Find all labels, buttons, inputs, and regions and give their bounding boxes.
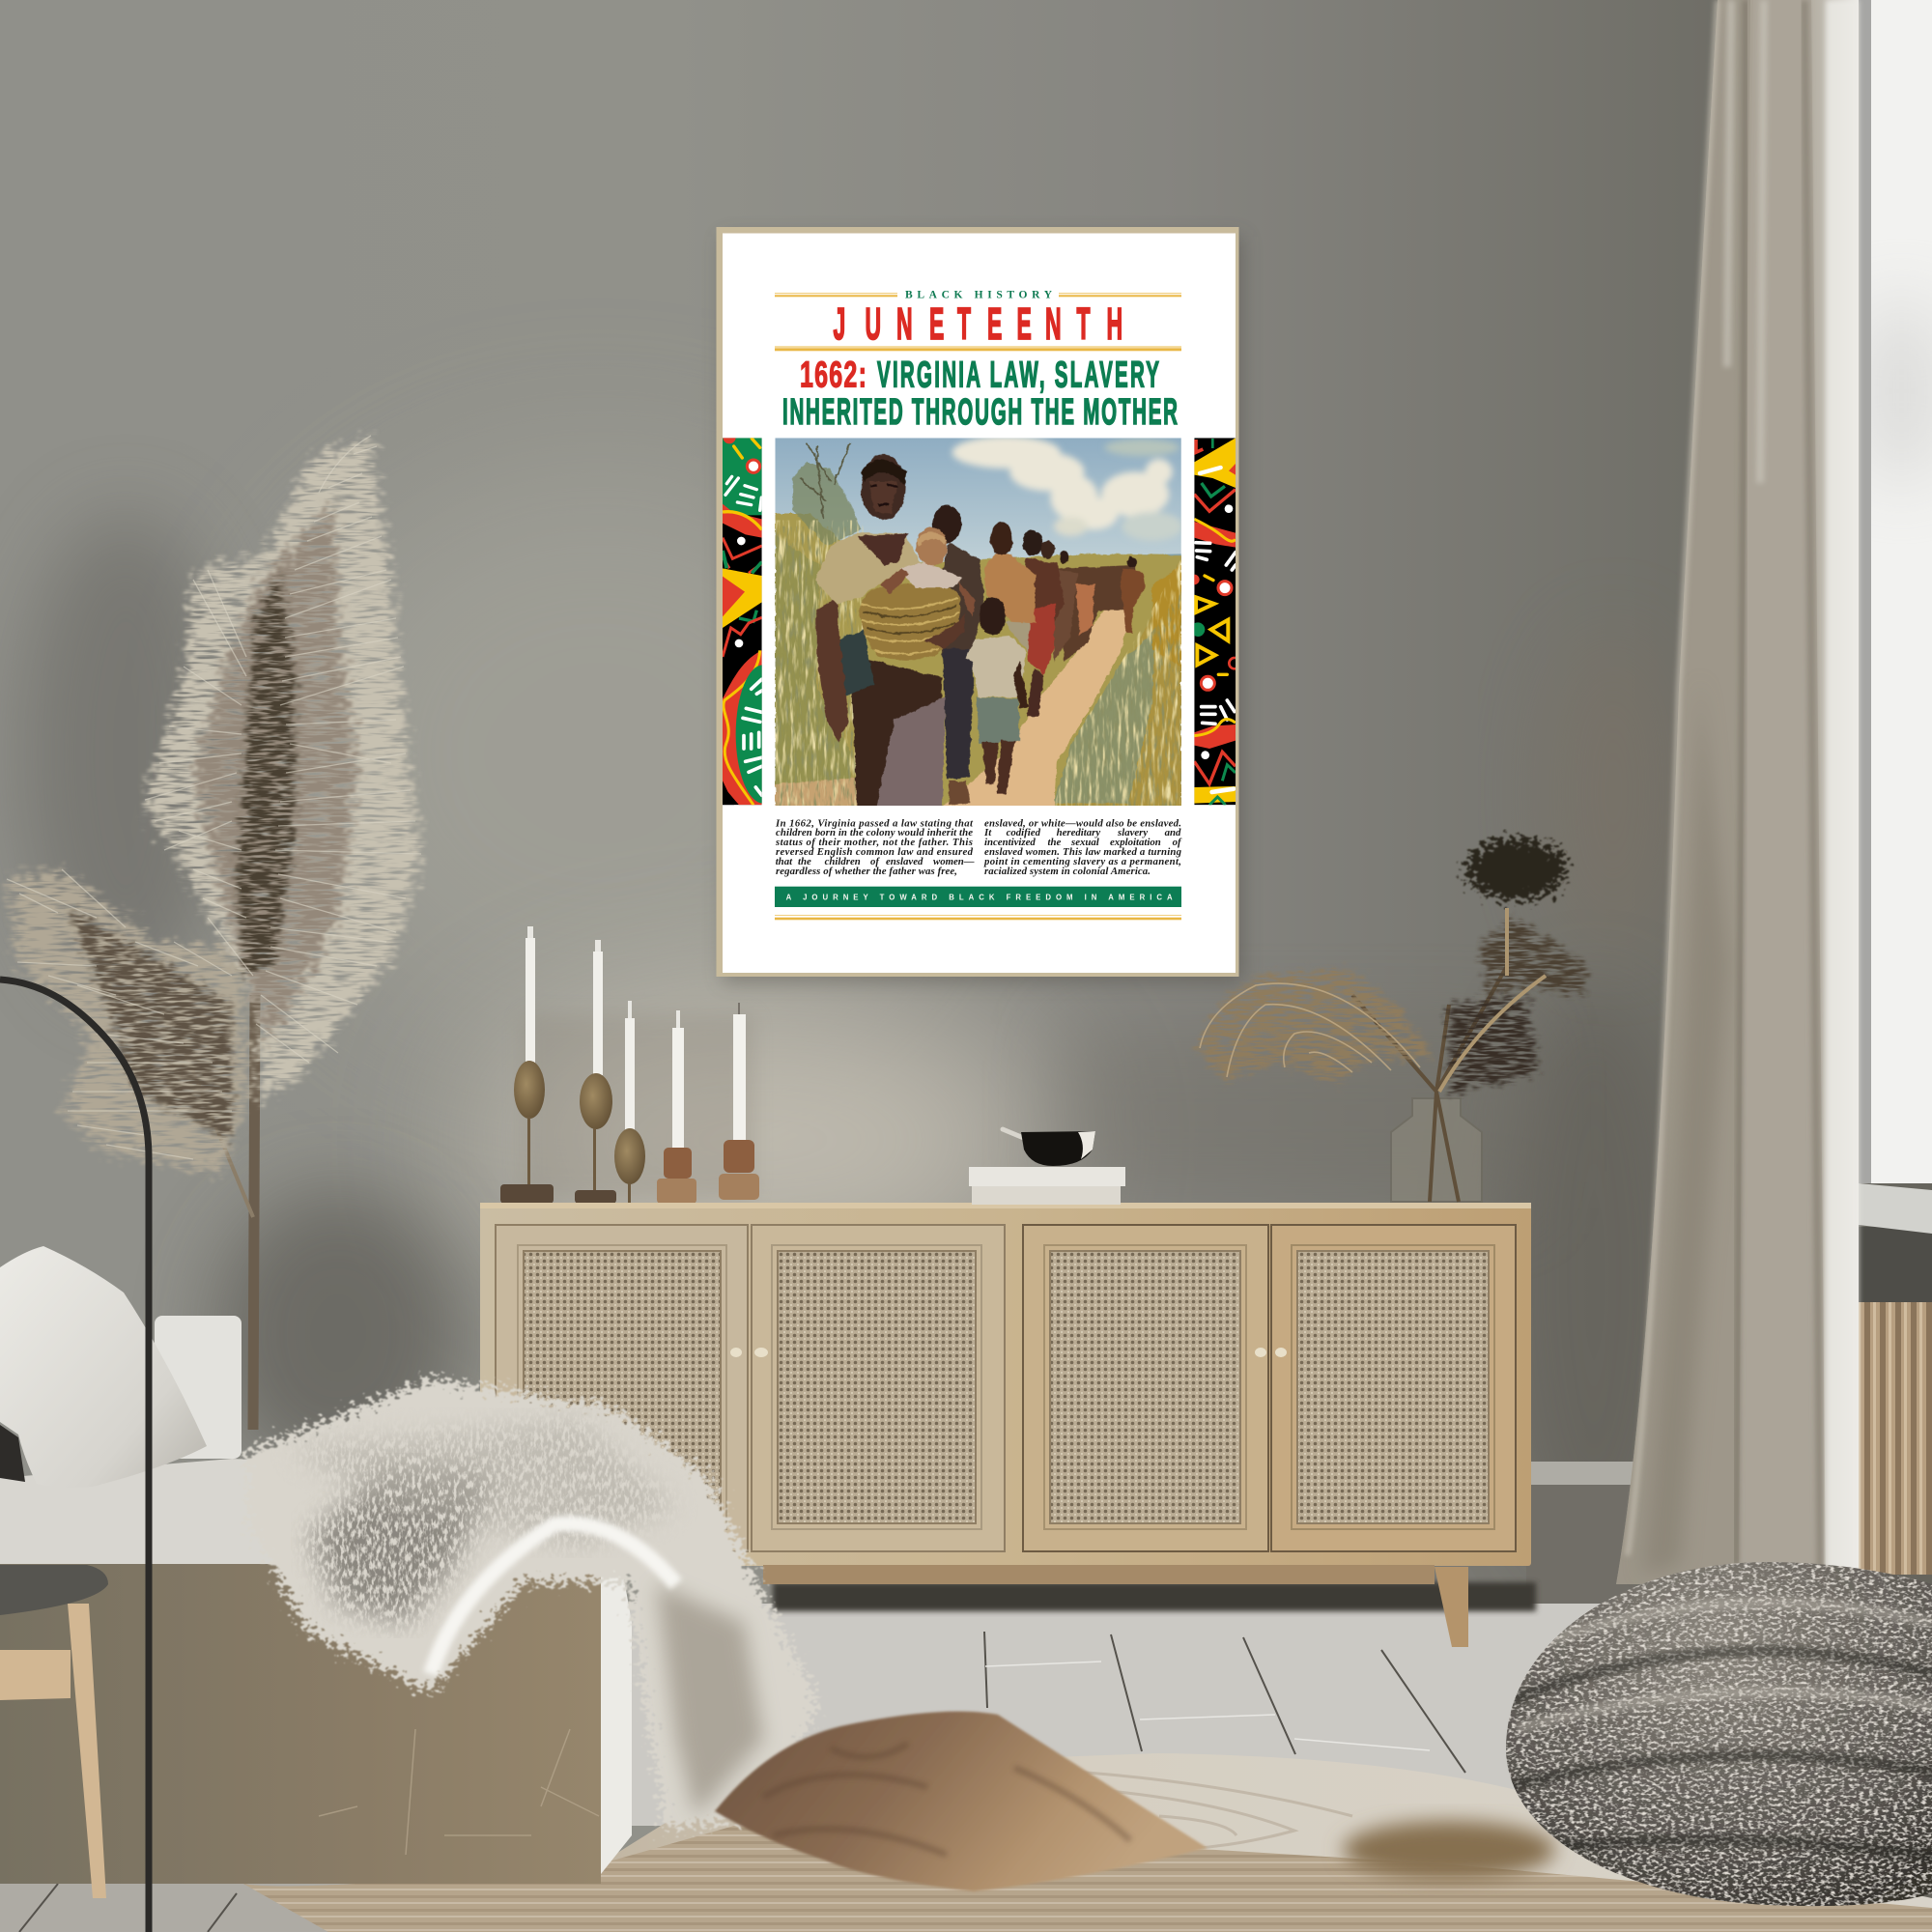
- top rule right: [1059, 293, 1181, 297]
- books: [969, 1167, 1125, 1205]
- candle 4: [657, 1010, 696, 1204]
- rug stripes: [243, 1826, 1932, 1932]
- field and grass: [775, 442, 1181, 816]
- body text column left: children born in the colony would inherit the: [776, 827, 973, 838]
- tan plume: [1197, 969, 1435, 1083]
- vase: [1391, 1098, 1482, 1202]
- window frame: [1855, 0, 1871, 1183]
- base side: [601, 1546, 632, 1874]
- distant hills: [1142, 554, 1181, 559]
- lower dark plume: [1449, 995, 1538, 1096]
- sofa: [0, 1459, 632, 1884]
- window: [1855, 0, 1932, 1302]
- line of figures in the distance: [1054, 551, 1146, 662]
- frame: [717, 227, 1238, 977]
- fur throw: [246, 1378, 819, 1829]
- bowl and spoon: [1003, 1129, 1095, 1166]
- side plume dark: [68, 908, 232, 1140]
- right grass highlights: [1054, 558, 1181, 807]
- sill: [1859, 1183, 1932, 1234]
- fold: left shade: [1616, 0, 1750, 1584]
- top rule left: [775, 293, 897, 297]
- grass dark strokes: [775, 526, 857, 807]
- knitted pouf: [1497, 1555, 1932, 1913]
- upper brown plume: [1481, 918, 1587, 995]
- dried plants in glass vase: [1197, 838, 1587, 1202]
- green banner: [775, 887, 1181, 907]
- body text column right: the: [1047, 837, 1062, 848]
- rule under title: [775, 346, 1181, 351]
- seat: [0, 1459, 483, 1565]
- man behind: [932, 505, 984, 805]
- dark wall under sill: [1855, 1227, 1932, 1302]
- fur white streak: [431, 1523, 676, 1674]
- fur upper strands: [290, 1420, 676, 1546]
- pampas grass: left tall plume and side plume: [7, 436, 421, 1430]
- heading line 1: 1662:: [800, 354, 867, 395]
- fur mass: [246, 1378, 819, 1829]
- body text column left: children: [825, 856, 861, 867]
- body text column left: enslaved: [886, 856, 923, 867]
- left pattern strip: [723, 438, 762, 806]
- body text column right: codified: [1007, 827, 1041, 838]
- side table: [0, 1565, 108, 1898]
- green banner: A JOURNEY TOWARD BLACK FREEDOM IN AMERICA: [786, 893, 1173, 901]
- heading line 1: VIRGINIA LAW, SLAVERY: [877, 355, 1159, 395]
- framed poster: [717, 227, 1242, 982]
- door 4: [1271, 1225, 1516, 1551]
- glass shading: [1871, 309, 1932, 473]
- eyebrow: Black History: BLACK HISTORY: [905, 290, 1053, 301]
- floor with tiles: [0, 1604, 1681, 1932]
- door 1: [496, 1225, 748, 1551]
- candle 3: [614, 1001, 645, 1205]
- body text column right: incentivized: [984, 837, 1036, 848]
- white pillow: [0, 1246, 207, 1488]
- body text column right: racialized system in colonial America.: [984, 866, 1151, 877]
- velvet floor pillow: [715, 1712, 1208, 1891]
- side plume light: [7, 869, 248, 1175]
- body text column right: slavery: [1117, 827, 1148, 838]
- body text column right: [983, 817, 1182, 877]
- dark flower head: [1465, 838, 1566, 900]
- knobs: [730, 1348, 1287, 1357]
- main plume body: [145, 436, 421, 1100]
- second woman: [984, 522, 1036, 652]
- body text column left: [775, 817, 975, 877]
- rug lower band: [243, 1826, 1932, 1932]
- candle shadows: [522, 1014, 753, 1198]
- body text column right: enslaved women. This law marked a turning: [984, 846, 1182, 858]
- fur tail shading: [657, 1584, 763, 1816]
- body text column right: exploitation: [1110, 837, 1161, 848]
- sky: [775, 438, 1181, 563]
- fold: top highlights: [1727, 0, 1764, 483]
- bright stem: [1439, 908, 1546, 1092]
- painting: enslaved women and children walking a path: [775, 437, 1182, 816]
- mother: [815, 454, 946, 816]
- fold: right crease: [1804, 0, 1821, 1584]
- diagonal stem: [184, 1048, 253, 1217]
- fold: lower left shadow: [1642, 676, 1729, 1575]
- plume feather strokes: [7, 436, 421, 1159]
- lower rail: [763, 1565, 1435, 1584]
- door 3: [1023, 1225, 1268, 1551]
- body text column left: status of their mother, not the father. This: [775, 837, 973, 848]
- body text column left: of: [870, 856, 880, 867]
- baseboard: [1526, 1462, 1642, 1613]
- candles: [500, 926, 759, 1205]
- radiator: [1850, 1299, 1932, 1575]
- body text column left: women—: [933, 856, 975, 867]
- leg: [1435, 1567, 1468, 1647]
- sideboard shadow: [773, 1582, 1536, 1611]
- curtain: [1616, 0, 1859, 1584]
- fold: left highlight: [1628, 0, 1718, 1555]
- plume strands: [1200, 983, 1420, 1077]
- candle 5: [719, 1003, 759, 1200]
- body text column right: of: [1173, 837, 1182, 848]
- door 2: [752, 1225, 1005, 1551]
- fold: middle panel: [1739, 0, 1826, 1584]
- rug: [243, 1753, 1932, 1932]
- sheer edge: [1826, 0, 1859, 1584]
- body text column right: enslaved, or white—would also be enslaved.: [984, 817, 1181, 829]
- body text column right: sexual: [1070, 837, 1099, 848]
- body text column left: reversed English common law and ensured: [776, 846, 974, 858]
- body text column right: and: [1165, 827, 1181, 838]
- rug ripples: [1014, 1768, 1352, 1851]
- third figure with red skirt: [1023, 529, 1064, 717]
- fur tuft under pouf: [1343, 1821, 1555, 1879]
- plume dark core: [237, 570, 295, 976]
- base front: [0, 1564, 601, 1884]
- bottom rule: [775, 915, 1181, 920]
- glass: [1860, 0, 1932, 1183]
- stalk: [253, 995, 255, 1430]
- body text column right: point in cementing slavery as a permanent,: [983, 856, 1181, 867]
- body text column left: regardless of whether the father was free,: [776, 866, 957, 877]
- body text column left: the: [798, 856, 811, 867]
- arc floor lamp: [0, 980, 149, 1932]
- top edge: [480, 1203, 1531, 1208]
- scratches: [319, 1729, 599, 1855]
- sideboard: [480, 1203, 1531, 1647]
- title: Juneteenth: JUNETEENTH: [834, 298, 1122, 349]
- fabric: [1616, 0, 1859, 1584]
- wall shadow: [723, 237, 1242, 982]
- grass highlight strokes: [775, 520, 864, 807]
- heading line 2: INHERITED THROUGH THE MOTHER: [782, 391, 1178, 433]
- stems: [1352, 966, 1507, 1202]
- body text column right: It: [983, 827, 992, 838]
- candle 2: [575, 940, 616, 1204]
- body text column left: that: [776, 856, 793, 867]
- top: [0, 1565, 108, 1615]
- plume mid tone: [193, 502, 357, 1043]
- body text column right: hereditary: [1057, 827, 1100, 838]
- back cushion: [155, 1316, 242, 1459]
- basket: [859, 584, 966, 660]
- fur dark centre: [309, 1468, 493, 1623]
- right pattern strip: [1194, 438, 1236, 806]
- clouds: [952, 437, 1182, 541]
- legs: [0, 1604, 106, 1898]
- body text column left: In 1662, Virginia passed a law stating that: [775, 817, 974, 829]
- dirt path: [943, 610, 1126, 806]
- boy: [966, 597, 1029, 794]
- paper: [723, 234, 1236, 973]
- tree: [793, 462, 861, 546]
- candle 1: [500, 926, 554, 1204]
- baby: [880, 527, 976, 616]
- right grass dark strokes: [1054, 591, 1181, 807]
- pillow shadow: [0, 1425, 25, 1482]
- cabinet body: [480, 1203, 1531, 1566]
- fold: dark crease: [1736, 0, 1746, 1565]
